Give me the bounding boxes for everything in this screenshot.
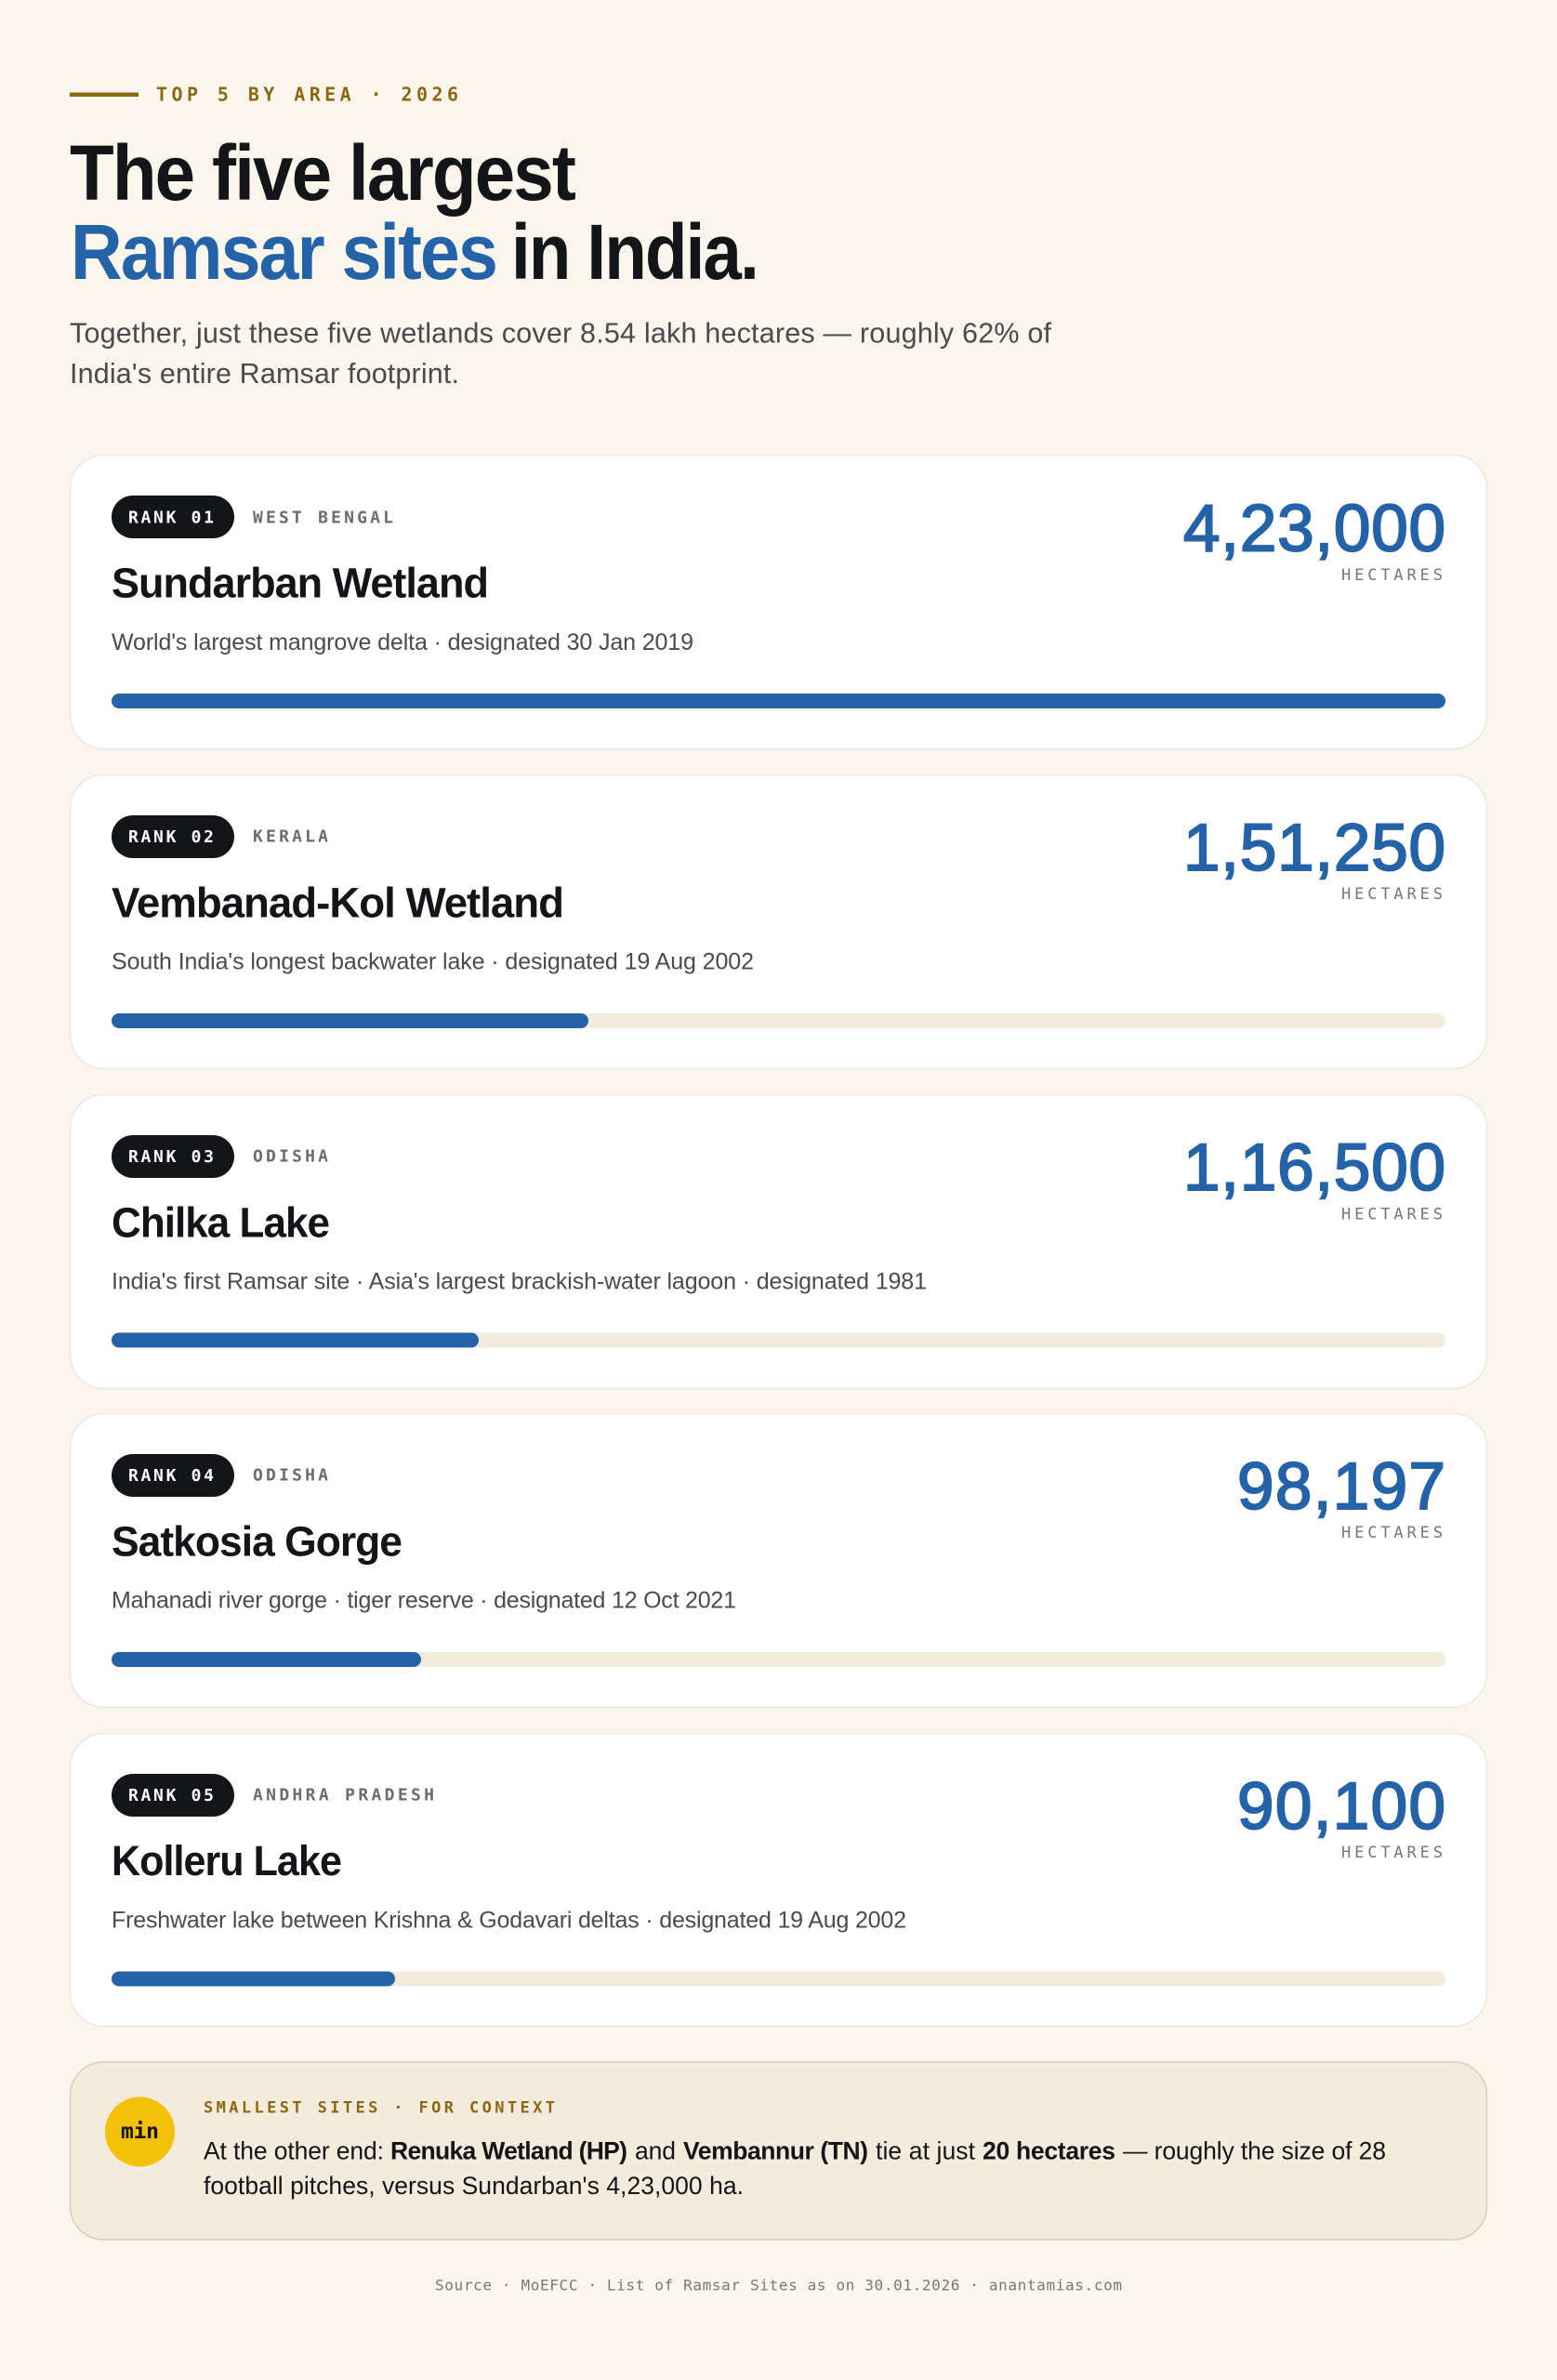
callout text: tie at just — [876, 2136, 976, 2164]
panel: rank 2 Vembanad-Kol Wetland — [71, 775, 1487, 1069]
description: World's largest mangrove delta · designated 30 Jan 2019 — [112, 629, 693, 655]
rank pill: RANK 01 — [128, 508, 214, 527]
bar: 100% — [112, 694, 1445, 708]
unit: HECTARES — [1341, 1524, 1443, 1542]
unit: HECTARES — [1341, 885, 1443, 904]
callout label: SMALLEST SITES · FOR CONTEXT — [204, 2099, 555, 2118]
unit: HECTARES — [1341, 1205, 1443, 1223]
callout text: Vembannur (TN) — [683, 2136, 868, 2164]
callout text: and — [635, 2136, 676, 2164]
state: WEST BENGAL — [253, 508, 393, 527]
callout text: football pitches, versus Sundarban's 4,23,000 ha. — [204, 2172, 744, 2200]
description: India's first Ramsar site · Asia's largest brackish-water lagoon · designated 1981 — [112, 1268, 927, 1294]
area value: 90,100 — [1237, 1770, 1445, 1844]
bar: 35.8% — [112, 1013, 1445, 1028]
title: in India. — [511, 208, 758, 296]
icon: min badge: min — [121, 2120, 159, 2144]
state: ODISHA — [253, 1465, 328, 1485]
unit: HECTARES — [1341, 566, 1443, 585]
area value: 4,23,000 — [1183, 493, 1445, 565]
rank pill — [112, 496, 234, 538]
callout text: Renuka Wetland (HP) — [390, 2136, 627, 2164]
description: Freshwater lake between Krishna & Godavari deltas · designated 19 Aug 2002 — [112, 1908, 906, 1934]
site name: Vembanad-Kol Wetland — [112, 879, 563, 926]
site name: Satkosia Gorge — [112, 1517, 402, 1566]
panel: rank 3 Chilka Lake — [71, 1095, 1487, 1389]
rank pill: RANK 03 — [128, 1147, 214, 1167]
rank pill: RANK 02 — [128, 827, 214, 847]
site name: Kolleru Lake — [112, 1837, 341, 1884]
bar: 21.3% — [112, 1971, 1445, 1986]
rank pill: RANK 05 — [128, 1786, 214, 1805]
panel: rank 4 Satkosia Gorge — [71, 1413, 1487, 1707]
title — [70, 129, 758, 296]
footer source: Source · MoEFCC · List of Ramsar Sites as on 30.01.2026 · anantamias.com — [435, 2276, 1122, 2294]
header — [70, 84, 1052, 390]
state: ODISHA — [253, 1146, 328, 1166]
panel: rank 5 Kolleru Lake — [71, 1733, 1487, 2027]
area value: 1,51,250 — [1183, 812, 1445, 885]
area value: 1,16,500 — [1183, 1131, 1445, 1205]
rank pill — [112, 1774, 234, 1817]
title: The five largest — [70, 129, 575, 217]
area value: 98,197 — [1237, 1450, 1445, 1524]
eyebrow label: TOP 5 BY AREA · 2026 — [156, 84, 458, 106]
unit: HECTARES — [1341, 1844, 1443, 1862]
state: ANDHRA PRADESH — [253, 1785, 434, 1805]
rank pill — [112, 815, 234, 858]
panel: rank 1 Sundarban Wetland — [71, 456, 1487, 749]
rank pill: RANK 04 — [128, 1466, 214, 1486]
site name: Sundarban Wetland — [112, 560, 488, 606]
bar: 23.2% — [112, 1652, 1445, 1667]
callout text: — roughly the size of 28 — [1123, 2136, 1386, 2164]
callout text — [204, 2136, 1386, 2200]
callout text: At the other end: — [204, 2136, 384, 2164]
callout text: 20 hectares — [983, 2136, 1115, 2164]
eyebrow rule — [70, 93, 139, 97]
description: Mahanadi river gorge · tiger reserve · designated 12 Oct 2021 — [112, 1588, 736, 1614]
title: Ramsar sites — [71, 208, 496, 296]
description: South India's longest backwater lake · designated 19 Aug 2002 — [112, 948, 754, 974]
site name: Chilka Lake — [112, 1199, 329, 1246]
state: KERALA — [253, 826, 328, 846]
subtitle: India's entire Ramsar footprint. — [70, 358, 459, 390]
bar: 27.5% — [112, 1333, 1445, 1348]
subtitle — [70, 318, 1052, 390]
subtitle: Together, just these five wetlands cover 8.54 lakh hectares — roughly 62% of — [70, 318, 1052, 350]
rank pill — [112, 1135, 234, 1178]
callout: smallest sites — [71, 2062, 1487, 2240]
icon: min badge — [105, 2097, 175, 2166]
rank pill — [112, 1454, 234, 1497]
